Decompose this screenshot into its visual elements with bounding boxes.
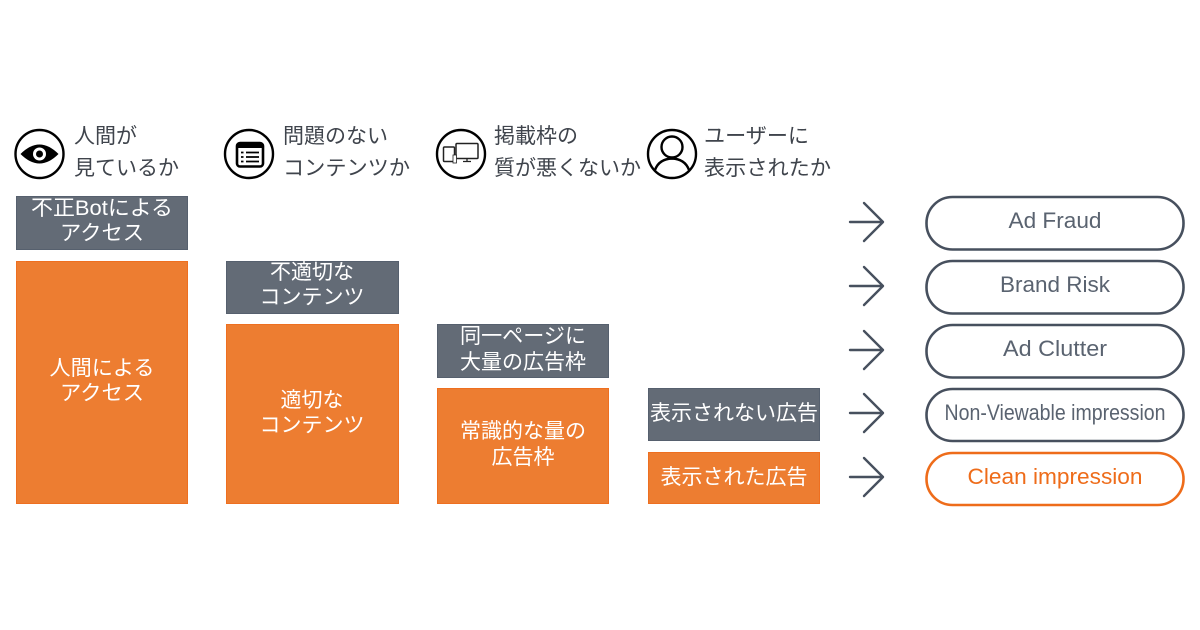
heading: content check (283, 125, 410, 180)
icon: user (648, 130, 696, 178)
pill: Ad Fraud (926, 197, 1184, 250)
pill: Ad Fraud: Ad Fraud (1008, 208, 1102, 233)
arrow: to Non-Viewable impression (850, 394, 883, 432)
box: appropriate content (226, 324, 398, 504)
heading: human viewing: 人間が (74, 125, 137, 148)
box: bot access: アクセス (60, 222, 144, 245)
box: inappropriate content: 不適切な (270, 261, 354, 284)
box: bot access (16, 196, 188, 250)
arrow: to Ad Clutter (850, 331, 883, 369)
heading: content check: 問題のない (283, 125, 388, 148)
box: too many ad slots: 大量の広告枠 (460, 351, 586, 374)
box: inappropriate content (226, 261, 398, 314)
icon: content list (225, 130, 273, 178)
box: normal ad slots (438, 388, 608, 504)
icon: eye (16, 130, 64, 178)
box: appropriate content: コンテンツ (260, 414, 364, 437)
arrow: to Brand Risk (850, 267, 883, 305)
heading: placement quality: 質が悪くないか (494, 157, 641, 180)
box: human access (16, 262, 188, 504)
box: appropriate content: 適切な (280, 389, 344, 412)
heading: displayed to user: 表示されたか (704, 157, 831, 180)
box: normal ad slots: 常識的な量の (460, 420, 586, 443)
box: ads not displayed (648, 388, 820, 440)
arrow: to Clean impression (850, 458, 883, 496)
heading: human viewing (74, 125, 179, 180)
box: ads displayed (648, 452, 820, 504)
box: ads not displayed: 表示されない広告 (650, 402, 818, 425)
pill: Clean impression: Clean impression (968, 464, 1142, 489)
heading: content check: コンテンツか (283, 157, 410, 180)
heading: human viewing: 見ているか (74, 157, 179, 180)
pill: Clean impression (926, 453, 1184, 505)
pill: Brand Risk (926, 261, 1184, 314)
box: normal ad slots: 広告枠 (492, 446, 554, 469)
box: too many ad slots (438, 324, 608, 378)
heading: displayed to user (704, 125, 831, 180)
heading: placement quality (494, 125, 641, 180)
pill: Brand Risk: Brand Risk (1000, 272, 1111, 297)
heading: displayed to user: ユーザーに (704, 125, 809, 148)
pill: Non-Viewable impression (926, 389, 1184, 441)
pill: Ad Clutter (926, 325, 1184, 378)
box: human access: アクセス (60, 382, 144, 405)
box: inappropriate content: コンテンツ (260, 286, 364, 309)
pill: Non-Viewable impression: Non-Viewable impression (944, 400, 1166, 425)
box: ads displayed: 表示された広告 (660, 466, 808, 489)
box: too many ad slots: 同一ページに (460, 325, 586, 348)
heading: placement quality: 掲載枠の (494, 125, 578, 148)
box: human access: 人間による (50, 357, 154, 380)
arrow: to Ad Fraud (850, 203, 883, 241)
icon: devices (437, 130, 485, 178)
box: bot access: 不正Botによる (31, 197, 173, 220)
pill: Ad Clutter: Ad Clutter (1003, 336, 1107, 361)
